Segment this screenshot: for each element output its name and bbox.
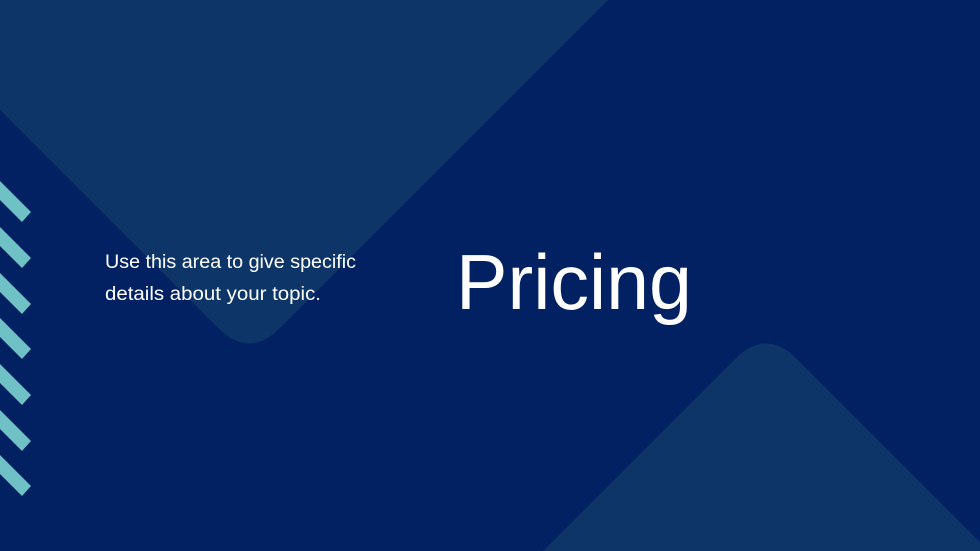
title: Pricing [456,238,692,326]
body text: Use this area to give specific [105,252,356,273]
body text [105,252,356,305]
diagonal stripes [0,181,31,496]
body text: details about your topic. [105,284,321,305]
top rounded triangle shape [0,0,608,344]
bottom rounded triangle shape [543,344,980,551]
